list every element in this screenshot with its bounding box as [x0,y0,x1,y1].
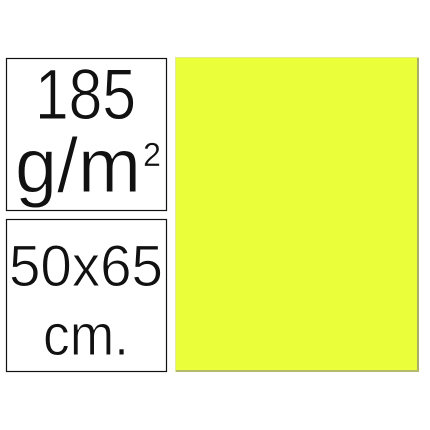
panel: paper weight [6,56,166,210]
weight unit g/m2: g/m [15,123,141,209]
size unit cm.: cm. [43,303,129,368]
weight value 185: 185 [35,56,136,135]
unit exponent: 2 [143,136,161,173]
size value 50x65: 50x65 [9,234,163,299]
panel: paper size [6,220,166,372]
yellow cardstock sheet [175,57,419,372]
